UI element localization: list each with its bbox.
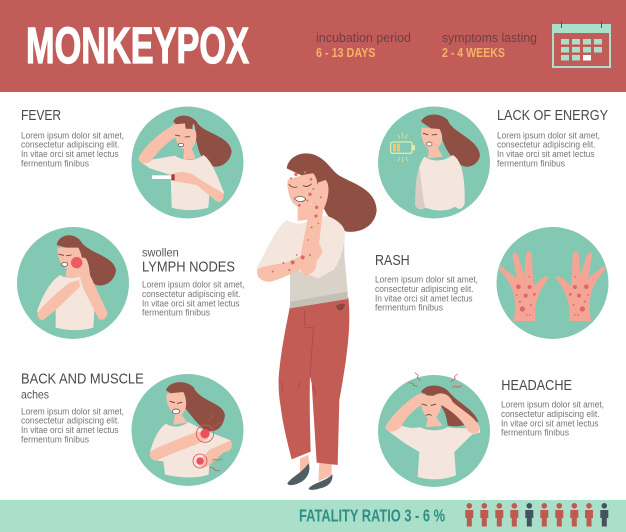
footer background bbox=[0, 500, 626, 532]
legs and shoes bbox=[279, 297, 349, 490]
headache text: fermentum finibus bbox=[501, 428, 569, 438]
lack of energy text bbox=[497, 130, 600, 168]
lack of energy text: fermentum finibus bbox=[497, 158, 565, 168]
lymph nodes text: In vitae orci sit amet lectus bbox=[142, 298, 240, 308]
incubation period: incubation period bbox=[316, 31, 411, 45]
rash text: Lorem ipsum dolor sit amet, bbox=[375, 275, 478, 285]
fever text bbox=[21, 130, 124, 168]
symptoms lasting: 2 - 4 WEEKS bbox=[442, 46, 505, 60]
fever text: consectetur adipiscing elit. bbox=[21, 140, 120, 150]
back and muscle text bbox=[21, 406, 124, 444]
rash heading: RASH bbox=[375, 253, 410, 269]
left hand bbox=[499, 251, 549, 321]
title: MONKEYPOX bbox=[26, 17, 249, 74]
lymph nodes text: Lorem ipsum dolor sit amet, bbox=[142, 280, 244, 290]
footer band bbox=[0, 500, 626, 532]
fever text: In vitae orci sit amet lectus bbox=[21, 149, 119, 159]
lymph nodes sub heading: swollen bbox=[142, 246, 179, 260]
facial features bbox=[289, 184, 311, 187]
headache text: Lorem ipsum dolor sit amet, bbox=[501, 400, 604, 410]
panel: fever bbox=[21, 106, 244, 218]
incubation period: 6 - 13 DAYS bbox=[316, 46, 376, 60]
panel: headache bbox=[378, 373, 604, 487]
hair bbox=[287, 153, 377, 232]
fever heading: FEVER bbox=[21, 108, 61, 124]
lymph nodes text: fermentum finibus bbox=[142, 308, 210, 318]
rash text: consectetur adipiscing elit. bbox=[375, 284, 474, 294]
icon: low battery bbox=[391, 133, 415, 162]
sweater sleeves and chest bbox=[257, 216, 345, 278]
arms bbox=[257, 244, 323, 282]
neck bbox=[298, 205, 312, 221]
back and muscle text: consectetur adipiscing elit. bbox=[21, 416, 120, 426]
back and muscle text: fermentum finibus bbox=[21, 434, 89, 444]
lack of energy text: Lorem ipsum dolor sit amet, bbox=[497, 130, 600, 140]
back and muscle heading: BACK AND MUSCLE bbox=[21, 371, 144, 387]
back and muscle text: In vitae orci sit amet lectus bbox=[21, 425, 119, 435]
rash text: In vitae orci sit amet lectus bbox=[375, 293, 473, 303]
header background bbox=[0, 0, 626, 92]
pictogram: ten people bbox=[465, 503, 608, 526]
headache text: consectetur adipiscing elit. bbox=[501, 409, 600, 419]
face bbox=[287, 173, 318, 208]
aches sub heading: aches bbox=[21, 387, 49, 401]
headache illustration bbox=[378, 373, 490, 487]
panel: lack of energy bbox=[378, 106, 608, 218]
fever illustration bbox=[132, 106, 244, 218]
fatality ratio text: FATALITY RATIO 3 - 6 % bbox=[299, 506, 445, 526]
fever text: Lorem ipsum dolor sit amet, bbox=[21, 130, 124, 140]
rash text: fermentum finibus bbox=[375, 303, 443, 313]
back and muscle text: Lorem ipsum dolor sit amet, bbox=[21, 406, 124, 416]
symptoms lasting bbox=[442, 31, 537, 60]
lymph nodes heading: LYMPH NODES bbox=[142, 259, 235, 275]
symptoms lasting: symptoms lasting bbox=[442, 31, 537, 45]
rash illustration: hands bbox=[496, 227, 608, 339]
incubation period bbox=[316, 31, 411, 60]
back and muscle illustration bbox=[132, 374, 244, 486]
sweater body bbox=[290, 217, 348, 302]
headache text bbox=[501, 400, 604, 438]
icon: calendar bbox=[552, 21, 611, 68]
central figure: woman with rash bbox=[257, 153, 377, 490]
right hand bbox=[555, 251, 605, 321]
lymph nodes text bbox=[142, 280, 244, 318]
panel: rash bbox=[375, 227, 608, 339]
lymph nodes text: consectetur adipiscing elit. bbox=[142, 289, 240, 299]
headache text: In vitae orci sit amet lectus bbox=[501, 418, 599, 428]
lack of energy heading: LACK OF ENERGY bbox=[497, 108, 608, 124]
headache heading: HEADACHE bbox=[501, 378, 572, 394]
lymph nodes illustration bbox=[17, 227, 129, 339]
panel: swollen lymph nodes bbox=[17, 227, 244, 339]
lack of energy text: In vitae orci sit amet lectus bbox=[497, 149, 595, 159]
rash text bbox=[375, 275, 478, 313]
fever text: fermentum finibus bbox=[21, 158, 89, 168]
rash spots bbox=[272, 171, 322, 273]
lack of energy illustration bbox=[378, 106, 490, 218]
panel: back and muscle aches bbox=[21, 371, 244, 486]
lack of energy text: consectetur adipiscing elit. bbox=[497, 140, 596, 150]
header banner bbox=[0, 0, 626, 92]
